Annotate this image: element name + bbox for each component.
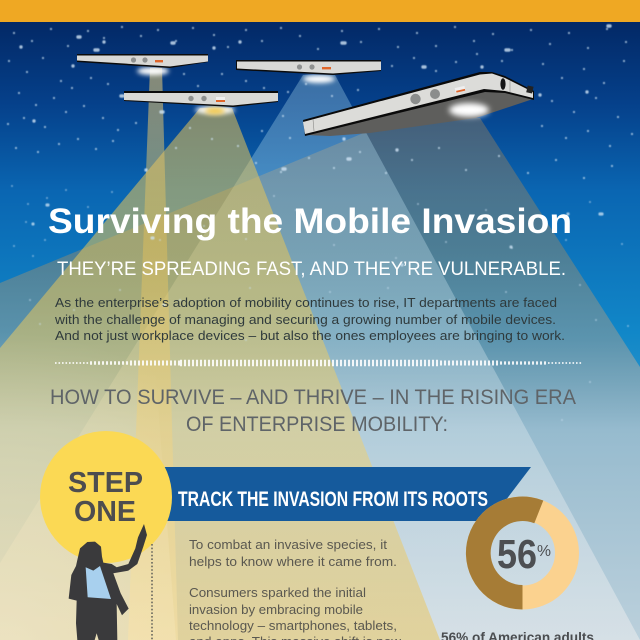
donut chart: 56%: % [537, 543, 551, 560]
icon: woman pointing silhouette [69, 524, 147, 640]
section heading: HOW TO SURVIVE – AND THRIVE – IN THE RISING ERA [50, 386, 576, 409]
light beam: narrow left phone (yellow) [128, 68, 178, 640]
intro paragraph: And not just workplace devices – but also the ones employees are bringing to work. [55, 328, 565, 343]
section heading: OF ENTERPRISE MOBILITY: [186, 413, 448, 436]
title: Surviving the Mobile Invasion [48, 202, 572, 241]
step one body text: technology – smartphones, tablets, [189, 618, 397, 633]
phone: lower centre [124, 91, 278, 114]
subtitle: THEY’RE SPREADING FAST, AND THEY’RE VULNERABLE. [57, 259, 566, 280]
phone: upper left [77, 54, 208, 75]
light beam: lower centre phone (yellow) [0, 108, 440, 640]
star field [8, 26, 632, 420]
step one body text: Consumers sparked the initial [189, 585, 366, 600]
step one body text [189, 537, 401, 640]
dotted vertical connector [151, 544, 153, 640]
intro paragraph [54, 295, 565, 343]
intro paragraph: As the enterprise’s adoption of mobility continues to rise, IT departments are faced [55, 295, 557, 310]
donut chart: 56% [466, 497, 567, 610]
ribbon banner [160, 467, 531, 521]
step one body text: helps to know where it came from. [189, 554, 397, 569]
step one body text: To combat an invasive species, it [189, 537, 387, 552]
intro paragraph: with the challenge of managing and securing a growing number of mobile devices. [54, 312, 556, 327]
phone: large foreground [303, 72, 534, 136]
dotted divider [55, 362, 582, 364]
section heading [50, 386, 576, 436]
ribbon banner: TRACK THE INVASION FROM ITS ROOTS [178, 488, 488, 511]
step one badge: ONE [74, 496, 136, 528]
step one badge [40, 431, 172, 563]
step one body text: invasion by embracing mobile [189, 602, 363, 617]
top orange band [0, 0, 640, 22]
donut chart: 56%: 56 [497, 531, 537, 577]
phone: upper right [236, 60, 381, 83]
step one badge: STEP [68, 467, 143, 499]
light wash on lower left of beam [0, 300, 176, 640]
